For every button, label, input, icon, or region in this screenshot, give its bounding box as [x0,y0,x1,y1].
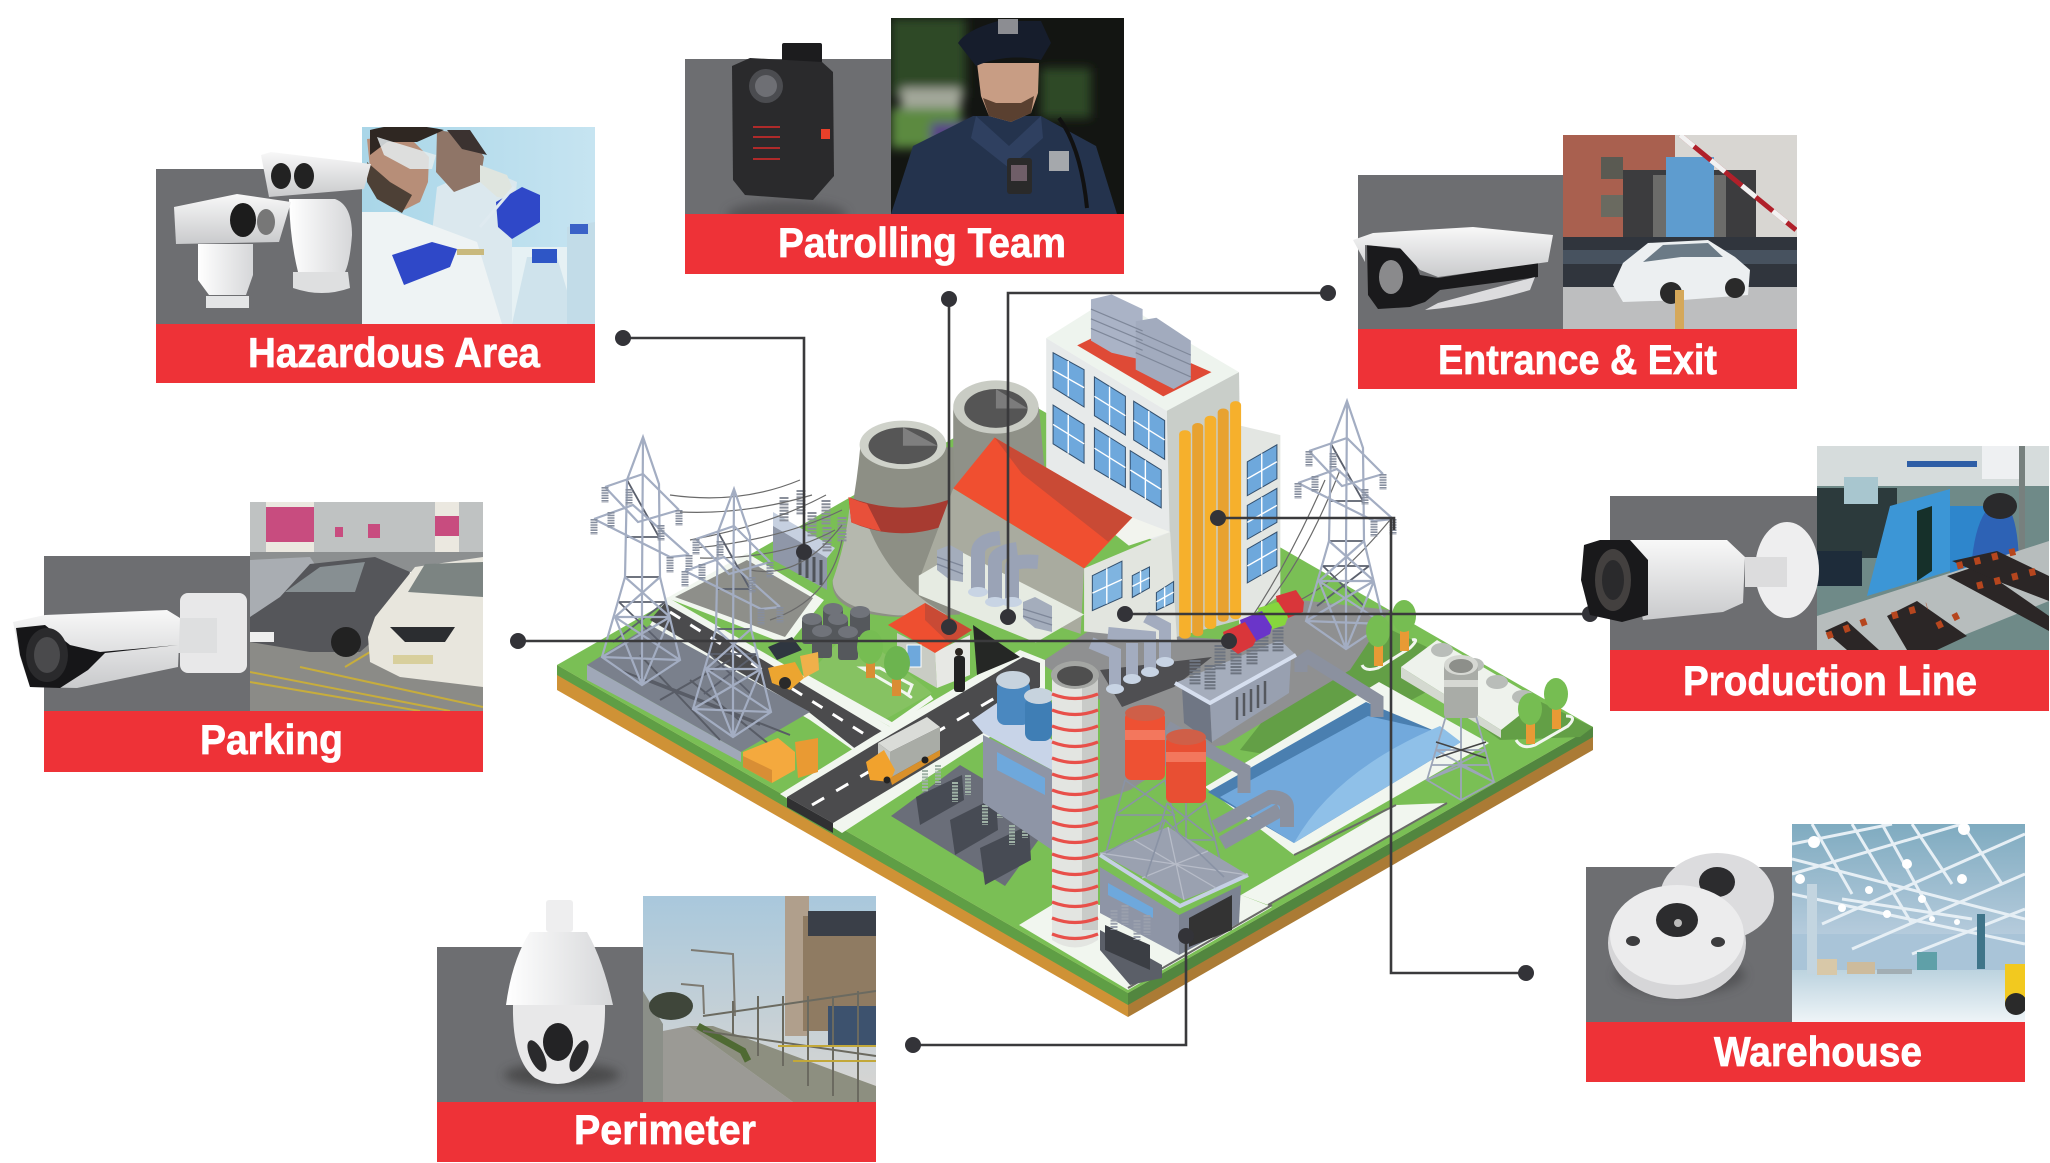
right transformer house [1175,627,1296,743]
panel: warehouse [1586,823,2027,1082]
camera: speed dome [504,900,620,1087]
yellow risers [1179,401,1241,639]
caption: Patrolling Team: Patrolling Team [778,219,1066,266]
transformer yard [891,765,1053,886]
red water tanks with lattice [1106,705,1224,880]
connector: parking [510,633,1237,649]
platform base [557,399,1593,1017]
main plant buildings [833,295,1280,643]
paved yard [1040,600,1390,800]
caption: Warehouse: Warehouse [1714,1028,1922,1075]
connector: entrance and exit [1000,285,1336,625]
transmission tower right [1298,401,1393,649]
rooftop cooling units [1401,640,1539,738]
camera: ANPR housing [1353,227,1553,310]
photo: gate with car [1563,135,1797,329]
connector: hazardous area [615,330,812,560]
cooling tower back [953,380,1046,488]
connector: perimeter [905,928,1194,1053]
ledge pipes and vents [937,538,1052,632]
photo: warehouse interior [1792,824,2025,1022]
process pipes [1167,657,1377,843]
connector: patrolling team [941,291,957,635]
road two [780,650,1045,833]
camera: varifocal bullet [1581,522,1819,622]
panel: perimeter [437,896,876,1162]
caption band [437,1102,876,1162]
blue tanks building [972,671,1060,850]
water tower [1427,655,1494,800]
connector: warehouse [1210,510,1534,981]
panel: parking [13,502,483,772]
transmission tower centre [685,489,780,737]
substation behind towers [773,490,842,590]
panel: patrolling team [685,18,1124,274]
trees right [1362,600,1573,747]
camera: thermal PTZ pair [174,152,371,308]
connector: production line [1117,606,1598,622]
photo: parking garage [250,502,483,711]
front lawn curb [806,640,932,720]
power lines [670,470,1390,620]
ground platform with roads, lawns and pool [557,399,1593,1017]
caption band [1586,1022,2025,1082]
cargo boxes [743,738,818,783]
caption: Production Line: Production Line [1683,657,1977,704]
striped chimney [1051,661,1099,948]
delivery truck [866,717,940,785]
front walkway strips [1019,803,1447,990]
upper concrete pad [667,553,824,645]
trees by gate [857,630,912,697]
panel: hazardous area [156,126,595,383]
caption band [44,711,483,772]
caption band [1358,329,1797,389]
cooling tower front [833,421,960,617]
tower pad [587,625,810,762]
road one [650,597,892,762]
caption: Entrance & Exit: Entrance & Exit [1438,336,1717,383]
process pipe cluster [1091,617,1174,694]
caption: Parking: Parking [200,716,343,763]
photo: plant perimeter fence [643,896,876,1102]
panel: entrance and exit [1353,135,1797,389]
barrels [802,603,870,660]
tall office block [1046,295,1280,639]
factory hall with red roof [919,438,1177,643]
transmission tower left [594,437,689,685]
camera: fisheye dome pair [1608,853,1774,999]
gate house [888,603,1020,688]
photo: laboratory [362,127,595,324]
front service building [1100,820,1248,985]
security guard [954,648,965,692]
caption band [1610,650,2049,711]
caption band [156,324,595,383]
caption band [685,214,1124,274]
camera: body worn camera [727,43,847,229]
panel: production line [1581,446,2049,711]
camera: vandal bullet [13,593,247,688]
caption: Hazardous Area: Hazardous Area [248,329,541,376]
forklift [768,637,819,690]
photo: police officer [891,18,1124,214]
photo: factory conveyor [1817,446,2049,650]
caption: Perimeter: Perimeter [574,1106,756,1153]
parked cars [1223,590,1304,654]
cooling pool [1205,682,1489,855]
